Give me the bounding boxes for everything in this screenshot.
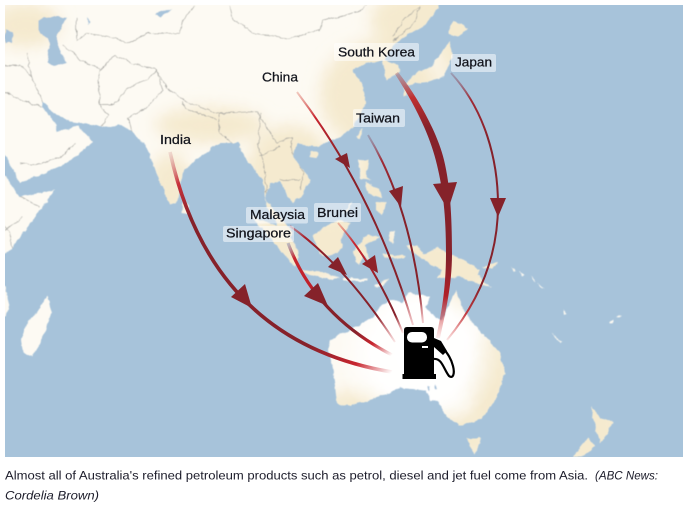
national borders	[5, 5, 420, 250]
arrow: Japan	[447, 73, 506, 340]
pump screen	[407, 332, 427, 342]
arrow: India	[170, 152, 392, 372]
arrow: Taiwan	[368, 135, 423, 323]
label: Brunei	[314, 203, 361, 222]
arrow: Malaysia	[290, 226, 395, 342]
caption text: Almost all of Australia's refined petroleum products such as petrol, diesel and jet fuel come from Asia.	[5, 468, 588, 482]
label: Malaysia: Malaysia	[250, 207, 306, 222]
labels	[160, 43, 496, 242]
arrow: China	[297, 92, 413, 325]
label: Brunei: Brunei	[317, 205, 358, 220]
label: Taiwan: Taiwan	[356, 110, 400, 126]
label: Japan	[451, 54, 496, 72]
caption	[5, 468, 658, 502]
label: India: India	[160, 132, 192, 147]
arrow: South Korea	[395, 72, 457, 338]
label: China: China	[262, 70, 299, 84]
photo credit line 1: (ABC News:	[595, 468, 658, 482]
icon: petrol pump	[402, 327, 454, 379]
white glow over Australia	[358, 292, 496, 419]
label: Taiwan	[353, 109, 405, 127]
arrow: Singapore	[288, 243, 392, 355]
pump slit	[422, 346, 428, 348]
nozzle	[434, 338, 447, 355]
label: South Korea: South Korea	[338, 44, 416, 60]
label: Japan: Japan	[455, 54, 492, 70]
arrow: Brunei	[338, 223, 403, 333]
hose	[434, 349, 454, 377]
flow arrows	[170, 72, 506, 372]
land masses	[5, 5, 622, 457]
photo credit line 2: Cordelia Brown)	[5, 488, 99, 502]
pump body	[402, 327, 436, 379]
label: Singapore: Singapore	[226, 226, 291, 240]
inland seas and lakes	[5, 9, 437, 391]
